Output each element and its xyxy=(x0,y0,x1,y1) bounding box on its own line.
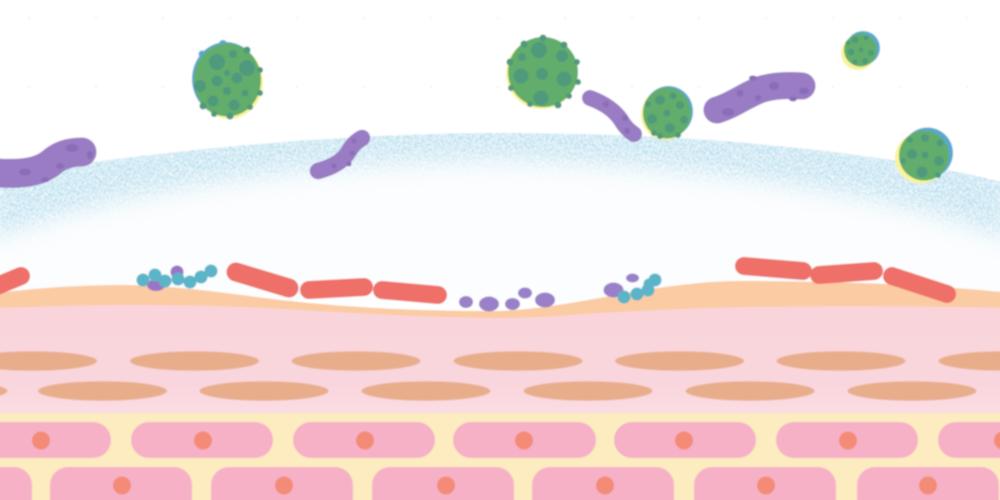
spots xyxy=(722,76,809,116)
surface bumps xyxy=(200,46,263,120)
virus small top right xyxy=(841,31,880,70)
mucus base tint xyxy=(0,133,1000,300)
blue fringe xyxy=(902,128,953,178)
surface spots xyxy=(846,36,874,64)
cyan beads left chain xyxy=(136,264,218,288)
spindle cells, lower row xyxy=(0,381,976,401)
small purple spores, centre xyxy=(459,288,555,312)
purple rod bacterium, centre xyxy=(590,98,634,134)
body xyxy=(717,85,802,110)
bead-chain bacteria, right xyxy=(604,274,662,304)
green body xyxy=(643,88,691,138)
surface spots xyxy=(514,42,572,106)
virus large centre xyxy=(506,34,581,109)
purple rod bacterium, upper right xyxy=(717,76,809,116)
layer: yellow base xyxy=(0,413,1000,500)
blue fringe xyxy=(644,86,693,137)
halo xyxy=(195,45,263,119)
blue fringe xyxy=(192,40,260,116)
halo xyxy=(506,38,577,109)
blue fringe xyxy=(846,31,880,65)
mucus stipple grain xyxy=(0,132,1000,244)
surface spots xyxy=(645,92,688,139)
body xyxy=(590,98,634,134)
spots xyxy=(19,144,93,182)
red rod bacteria, left group xyxy=(0,272,438,295)
bead-chain bacteria, left xyxy=(136,264,218,291)
pink cells, upper row xyxy=(0,422,1000,458)
purple spores behind right chain xyxy=(604,274,639,298)
spots xyxy=(332,138,356,168)
pink cells, lower row xyxy=(0,467,999,500)
cyan beads right chain xyxy=(618,274,662,304)
purple rod bacterium, near mucus edge xyxy=(318,138,362,171)
halo xyxy=(641,89,690,140)
surface spots xyxy=(900,134,944,178)
green body xyxy=(899,130,949,180)
virus medium centre xyxy=(641,86,693,140)
surface spots xyxy=(194,50,255,110)
virus medium right xyxy=(895,128,953,184)
skin tissue layers xyxy=(0,281,1000,500)
purple spores behind left chain xyxy=(147,266,184,291)
cell nuclei, lower row xyxy=(113,476,937,494)
spindle cells, upper row xyxy=(0,351,1000,371)
layer: light pink dermis xyxy=(0,301,1000,413)
halo xyxy=(895,132,946,184)
spots xyxy=(603,101,630,134)
green body xyxy=(844,34,877,66)
cell nuclei, upper row xyxy=(32,432,1000,450)
green body xyxy=(508,37,578,107)
mucus layer: stippled blue dome xyxy=(0,132,1000,248)
body xyxy=(318,138,362,171)
layer: orange skin surface xyxy=(0,281,1000,318)
halo xyxy=(841,36,875,70)
red rod bacteria, right group xyxy=(744,266,947,294)
purple rod bacterium, far left xyxy=(0,144,93,182)
body xyxy=(0,152,82,173)
green body xyxy=(194,44,261,116)
virus large left xyxy=(192,40,263,120)
surface bumps xyxy=(506,34,581,108)
